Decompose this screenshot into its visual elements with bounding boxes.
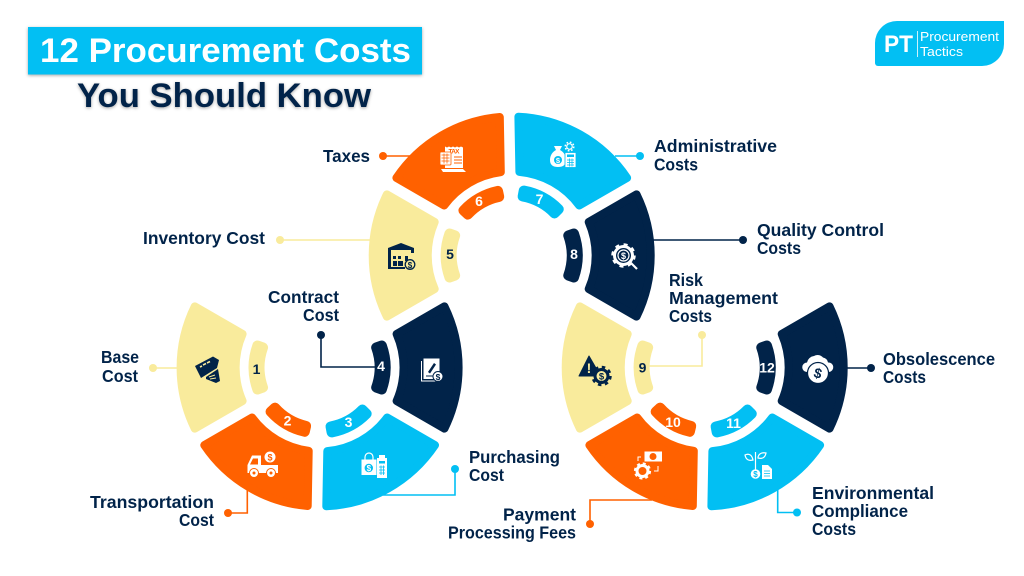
logo: Procurement Tactics: Procurement bbox=[920, 29, 999, 44]
number tab 12 bbox=[761, 345, 771, 390]
logo: Procurement Tactics bbox=[875, 21, 1004, 66]
label: Risk Management Costs: Costs bbox=[669, 306, 712, 326]
item 8: Quality Control Costs bbox=[568, 194, 884, 317]
connector 8 bbox=[652, 236, 747, 244]
number 12: 12 bbox=[759, 360, 775, 376]
icon: warning triangle and gear bbox=[579, 356, 610, 385]
icon: cloud with coin bbox=[802, 355, 833, 384]
label: Transportation Cost bbox=[90, 492, 214, 530]
number tab 4 bbox=[376, 345, 386, 390]
icon: plant with document: $ bbox=[753, 470, 758, 479]
item 9: Risk Management Costs bbox=[566, 270, 778, 429]
label: Environmental Compliance Costs: Compliance bbox=[812, 501, 908, 521]
logo: Procurement Tactics: Tactics bbox=[920, 44, 964, 59]
icon: contract with pen bbox=[422, 358, 443, 382]
label: Taxes: Taxes bbox=[323, 146, 370, 166]
title banner: 12 Procurement Costs bbox=[40, 32, 411, 70]
number tab 5 bbox=[446, 233, 455, 278]
label: Purchasing Cost bbox=[469, 447, 560, 485]
item 7: Administrative Costs bbox=[518, 117, 777, 214]
icon: warehouse: $ bbox=[408, 261, 413, 270]
segment 1 bbox=[181, 306, 243, 429]
segment 11 bbox=[711, 418, 820, 506]
item 4: Contract Cost bbox=[268, 287, 459, 429]
number tab 1 bbox=[254, 345, 263, 390]
segment 8 bbox=[589, 194, 651, 317]
icon: money bag and calculator: $ bbox=[556, 156, 561, 165]
connector 6 bbox=[379, 152, 410, 160]
title bbox=[28, 27, 422, 115]
connector 10 bbox=[586, 500, 652, 528]
label: Inventory Cost: Inventory Cost bbox=[143, 228, 265, 248]
number 6: 6 bbox=[475, 193, 483, 209]
connector 12 bbox=[845, 364, 875, 372]
number 11: 11 bbox=[726, 415, 741, 431]
number 8: 8 bbox=[570, 246, 578, 262]
item 1: Base Cost bbox=[101, 306, 263, 429]
icon: plant with document bbox=[745, 452, 772, 479]
icon: warning triangle and gear: ! bbox=[587, 360, 591, 376]
number tab 10 bbox=[654, 407, 693, 434]
label: Base Cost bbox=[101, 347, 139, 386]
number tab 8 bbox=[568, 233, 578, 278]
label: Contract Cost: Contract bbox=[268, 287, 339, 307]
label: Risk Management Costs: Risk bbox=[669, 270, 703, 290]
item 2: Transportation Cost bbox=[90, 407, 309, 530]
number 1: 1 bbox=[253, 361, 261, 377]
label: Administrative Costs: Costs bbox=[654, 154, 698, 174]
label: Payment Processing Fees bbox=[448, 504, 576, 542]
label: Payment Processing Fees: Payment bbox=[503, 504, 576, 524]
icon: truck with dollar: $ bbox=[267, 452, 273, 462]
item 5: Inventory Cost bbox=[143, 194, 455, 317]
connector 7 bbox=[615, 152, 644, 160]
label: Risk Management Costs bbox=[669, 270, 778, 326]
segment 9 bbox=[566, 306, 628, 429]
label: Transportation Cost: Cost bbox=[179, 510, 214, 530]
label: Payment Processing Fees: Processing Fees bbox=[448, 522, 576, 542]
item 6: Taxes bbox=[323, 117, 501, 215]
label: Risk Management Costs: Management bbox=[669, 288, 778, 308]
label: Contract Cost bbox=[268, 287, 339, 325]
connector 2 bbox=[224, 488, 247, 517]
number tab 11 bbox=[714, 409, 753, 435]
label: Environmental Compliance Costs: Environmental bbox=[812, 483, 934, 503]
label: Environmental Compliance Costs: Costs bbox=[812, 519, 856, 539]
segment 2 bbox=[204, 418, 309, 506]
segment 7 bbox=[518, 117, 627, 206]
item 12: Obsolescence Costs bbox=[759, 306, 995, 429]
icon: shopping bag and card terminal bbox=[362, 453, 387, 478]
icon: gear with magnifier: $ bbox=[621, 251, 626, 261]
item 11: Environmental Compliance Costs bbox=[711, 409, 934, 539]
number 4: 4 bbox=[377, 358, 385, 374]
item 3: Purchasing Cost bbox=[326, 409, 560, 506]
label: Environmental Compliance Costs bbox=[812, 483, 934, 539]
number 7: 7 bbox=[536, 191, 544, 207]
label: Purchasing Cost: Cost bbox=[469, 465, 504, 485]
number 2: 2 bbox=[284, 412, 292, 428]
icon: cloud with coin: $ bbox=[812, 364, 824, 382]
label: Quality Control Costs: Quality Control bbox=[757, 220, 884, 240]
icon: contract with pen: $ bbox=[436, 372, 441, 382]
label: Obsolescence Costs bbox=[883, 349, 995, 387]
number tab 2 bbox=[269, 407, 308, 434]
connector 4 bbox=[317, 331, 376, 367]
number tab 9 bbox=[639, 345, 648, 390]
icon: warning triangle and gear: $ bbox=[599, 372, 605, 382]
icon: money bag and calculator bbox=[550, 142, 576, 168]
label: Quality Control Costs bbox=[757, 220, 884, 258]
label: Base Cost: Cost bbox=[102, 366, 138, 386]
segment 12 bbox=[782, 306, 844, 429]
label: Contract Cost: Cost bbox=[303, 305, 339, 325]
segment 3 bbox=[326, 418, 435, 506]
label: Base Cost: Base bbox=[101, 347, 139, 367]
number 3: 3 bbox=[345, 414, 353, 430]
label: Purchasing Cost: Purchasing bbox=[469, 447, 560, 467]
icon: tax receipt: TAX bbox=[448, 148, 460, 156]
segment 10 bbox=[589, 418, 694, 506]
segment 5 bbox=[373, 194, 435, 317]
number tab 3 bbox=[329, 409, 368, 435]
number 10: 10 bbox=[665, 414, 681, 430]
connector 3 bbox=[383, 465, 459, 495]
icon: price tags bbox=[195, 356, 220, 383]
segment 6 bbox=[396, 117, 501, 206]
number tab 7 bbox=[521, 188, 560, 214]
number tab 6 bbox=[462, 188, 501, 215]
number 5: 5 bbox=[446, 246, 454, 262]
icon: shopping bag and card terminal: $ bbox=[367, 464, 372, 473]
icon: truck with dollar bbox=[248, 452, 278, 478]
label: Administrative Costs bbox=[654, 136, 777, 174]
icon: gear with magnifier bbox=[612, 244, 637, 269]
item 10: Payment Processing Fees bbox=[448, 407, 694, 542]
label: Administrative Costs: Administrative bbox=[654, 136, 777, 156]
icon: warehouse bbox=[388, 243, 415, 270]
title second line: You Should Know bbox=[77, 77, 372, 115]
connector 9 bbox=[648, 331, 706, 366]
connector 11 bbox=[778, 490, 801, 516]
label: Obsolescence Costs: Costs bbox=[883, 367, 926, 387]
logo: Procurement Tactics: PT bbox=[884, 31, 913, 58]
number 9: 9 bbox=[639, 360, 647, 376]
icon: banknote and gear bbox=[635, 452, 662, 478]
connector 5 bbox=[276, 236, 372, 244]
segment 4 bbox=[397, 306, 459, 429]
label: Quality Control Costs: Costs bbox=[757, 238, 801, 258]
label: Obsolescence Costs: Obsolescence bbox=[883, 349, 995, 369]
connector 1 bbox=[149, 364, 178, 372]
label: Transportation Cost: Transportation bbox=[90, 492, 214, 512]
icon: tax receipt bbox=[440, 146, 466, 172]
